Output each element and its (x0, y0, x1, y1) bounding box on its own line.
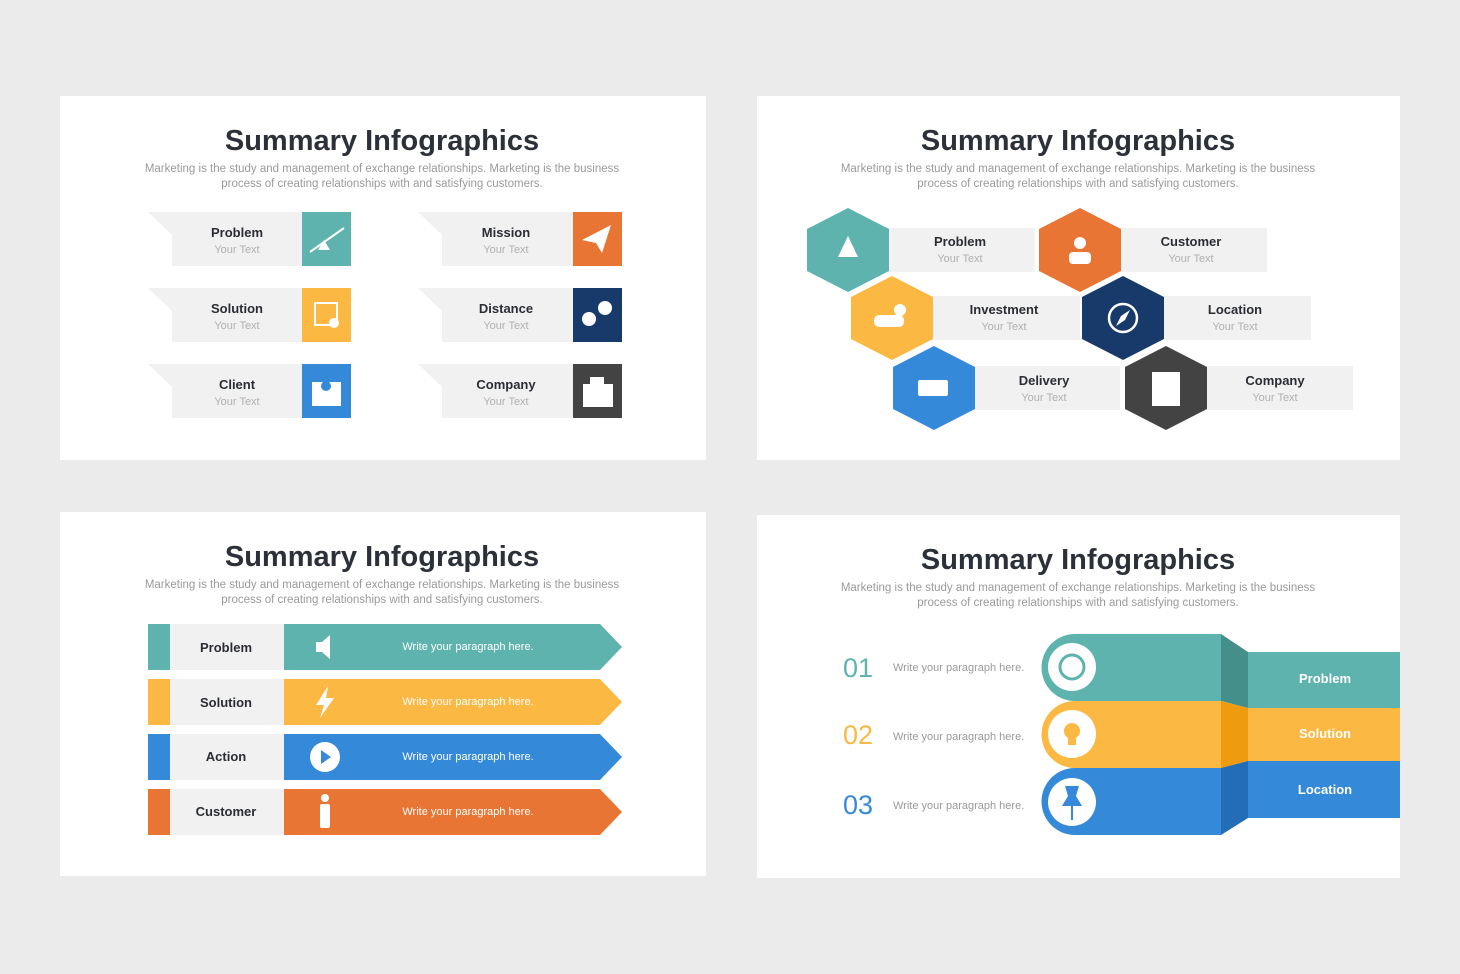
row: solution: Solution (200, 695, 252, 710)
item 01: 01 (843, 653, 873, 683)
row: customer: Customer (196, 804, 256, 819)
item: solution: Your Text (214, 320, 260, 332)
item 03: 03 (843, 790, 873, 820)
item: mission: Your Text (483, 244, 529, 256)
gray boxes (888, 228, 1353, 410)
item: client: Your Text (214, 396, 260, 408)
item: mission: Mission (482, 225, 530, 240)
hex: investment: Your Text (981, 321, 1027, 333)
hex: customer: Your Text (1168, 253, 1214, 265)
item: problem: Problem (211, 225, 263, 240)
item 03: Write your paragraph here. (893, 800, 1024, 812)
item: company (418, 364, 622, 418)
hex: problem: Your Text (937, 253, 983, 265)
band: location: Location (1298, 782, 1352, 797)
hex: customer: Customer (1161, 234, 1221, 249)
item: client (148, 364, 351, 418)
item 02 (843, 720, 1024, 750)
hex: customer (1039, 208, 1221, 292)
row: problem: Write your paragraph here. (402, 641, 534, 653)
subtitle 4: Marketing is the study and management of exchange relationships. Marketing is the business (841, 582, 1315, 594)
row: customer (148, 789, 622, 835)
row: solution (148, 679, 622, 725)
hex: company (1125, 346, 1305, 430)
item 01: Write your paragraph here. (893, 662, 1024, 674)
item: company: Your Text (483, 396, 529, 408)
hex: location: Your Text (1212, 321, 1258, 333)
title 1: Summary Infographics (225, 125, 539, 157)
title 3: Summary Infographics (225, 541, 539, 573)
item: distance: Distance (479, 301, 533, 316)
item: problem (148, 212, 351, 266)
row: action: Action (206, 749, 246, 764)
hex: company: Your Text (1252, 392, 1298, 404)
hex: problem: Problem (934, 234, 986, 249)
row: solution: Write your paragraph here. (402, 696, 534, 708)
hex: location: Location (1208, 302, 1262, 317)
item: mission (418, 212, 622, 266)
band: problem: Problem (1299, 671, 1351, 686)
subtitle 1: Marketing is the study and management of exchange relationships. Marketing is the business (145, 163, 619, 175)
item: solution (148, 288, 351, 342)
item: client: Client (219, 377, 256, 392)
hex: investment (851, 276, 1039, 360)
hex: investment: Investment (970, 302, 1039, 317)
row: action (148, 734, 622, 780)
row: customer: Write your paragraph here. (402, 806, 534, 818)
hex: delivery: Your Text (1021, 392, 1067, 404)
panel: 3d bands (757, 515, 1400, 878)
title 4: Summary Infographics (921, 544, 1235, 576)
row: problem: Problem (200, 640, 252, 655)
item 01 (843, 653, 1024, 683)
hex: delivery: Delivery (1019, 373, 1070, 388)
item: company: Company (476, 377, 536, 392)
subtitle 2: process of creating relationships with and satisfying customers. (917, 178, 1239, 190)
item: solution: Solution (211, 301, 263, 316)
title 2: Summary Infographics (921, 125, 1235, 157)
subtitle 2: Marketing is the study and management of exchange relationships. Marketing is the business (841, 163, 1315, 175)
band: solution: Solution (1299, 726, 1351, 741)
subtitle 3: Marketing is the study and management of exchange relationships. Marketing is the business (145, 579, 619, 591)
item: distance: Your Text (483, 320, 529, 332)
item: problem: Your Text (214, 244, 260, 256)
subtitle 3: process of creating relationships with and satisfying customers. (221, 594, 543, 606)
band: location (1041, 761, 1400, 835)
panel: arrows (60, 512, 706, 876)
panel: icon list (60, 96, 706, 460)
item: distance (418, 288, 622, 342)
item 03 (843, 790, 1024, 820)
subtitle 1: process of creating relationships with and satisfying customers. (221, 178, 543, 190)
hex: company: Company (1245, 373, 1305, 388)
row: action: Write your paragraph here. (402, 751, 534, 763)
panel: hexagons (757, 96, 1400, 460)
hex: problem (807, 208, 986, 292)
hex: delivery (893, 346, 1070, 430)
subtitle 4: process of creating relationships with and satisfying customers. (917, 597, 1239, 609)
band: solution (1041, 701, 1400, 768)
row: problem (148, 624, 622, 670)
item 02: Write your paragraph here. (893, 731, 1024, 743)
hex: location (1082, 276, 1262, 360)
band: problem (1041, 634, 1400, 708)
item 02: 02 (843, 720, 873, 750)
